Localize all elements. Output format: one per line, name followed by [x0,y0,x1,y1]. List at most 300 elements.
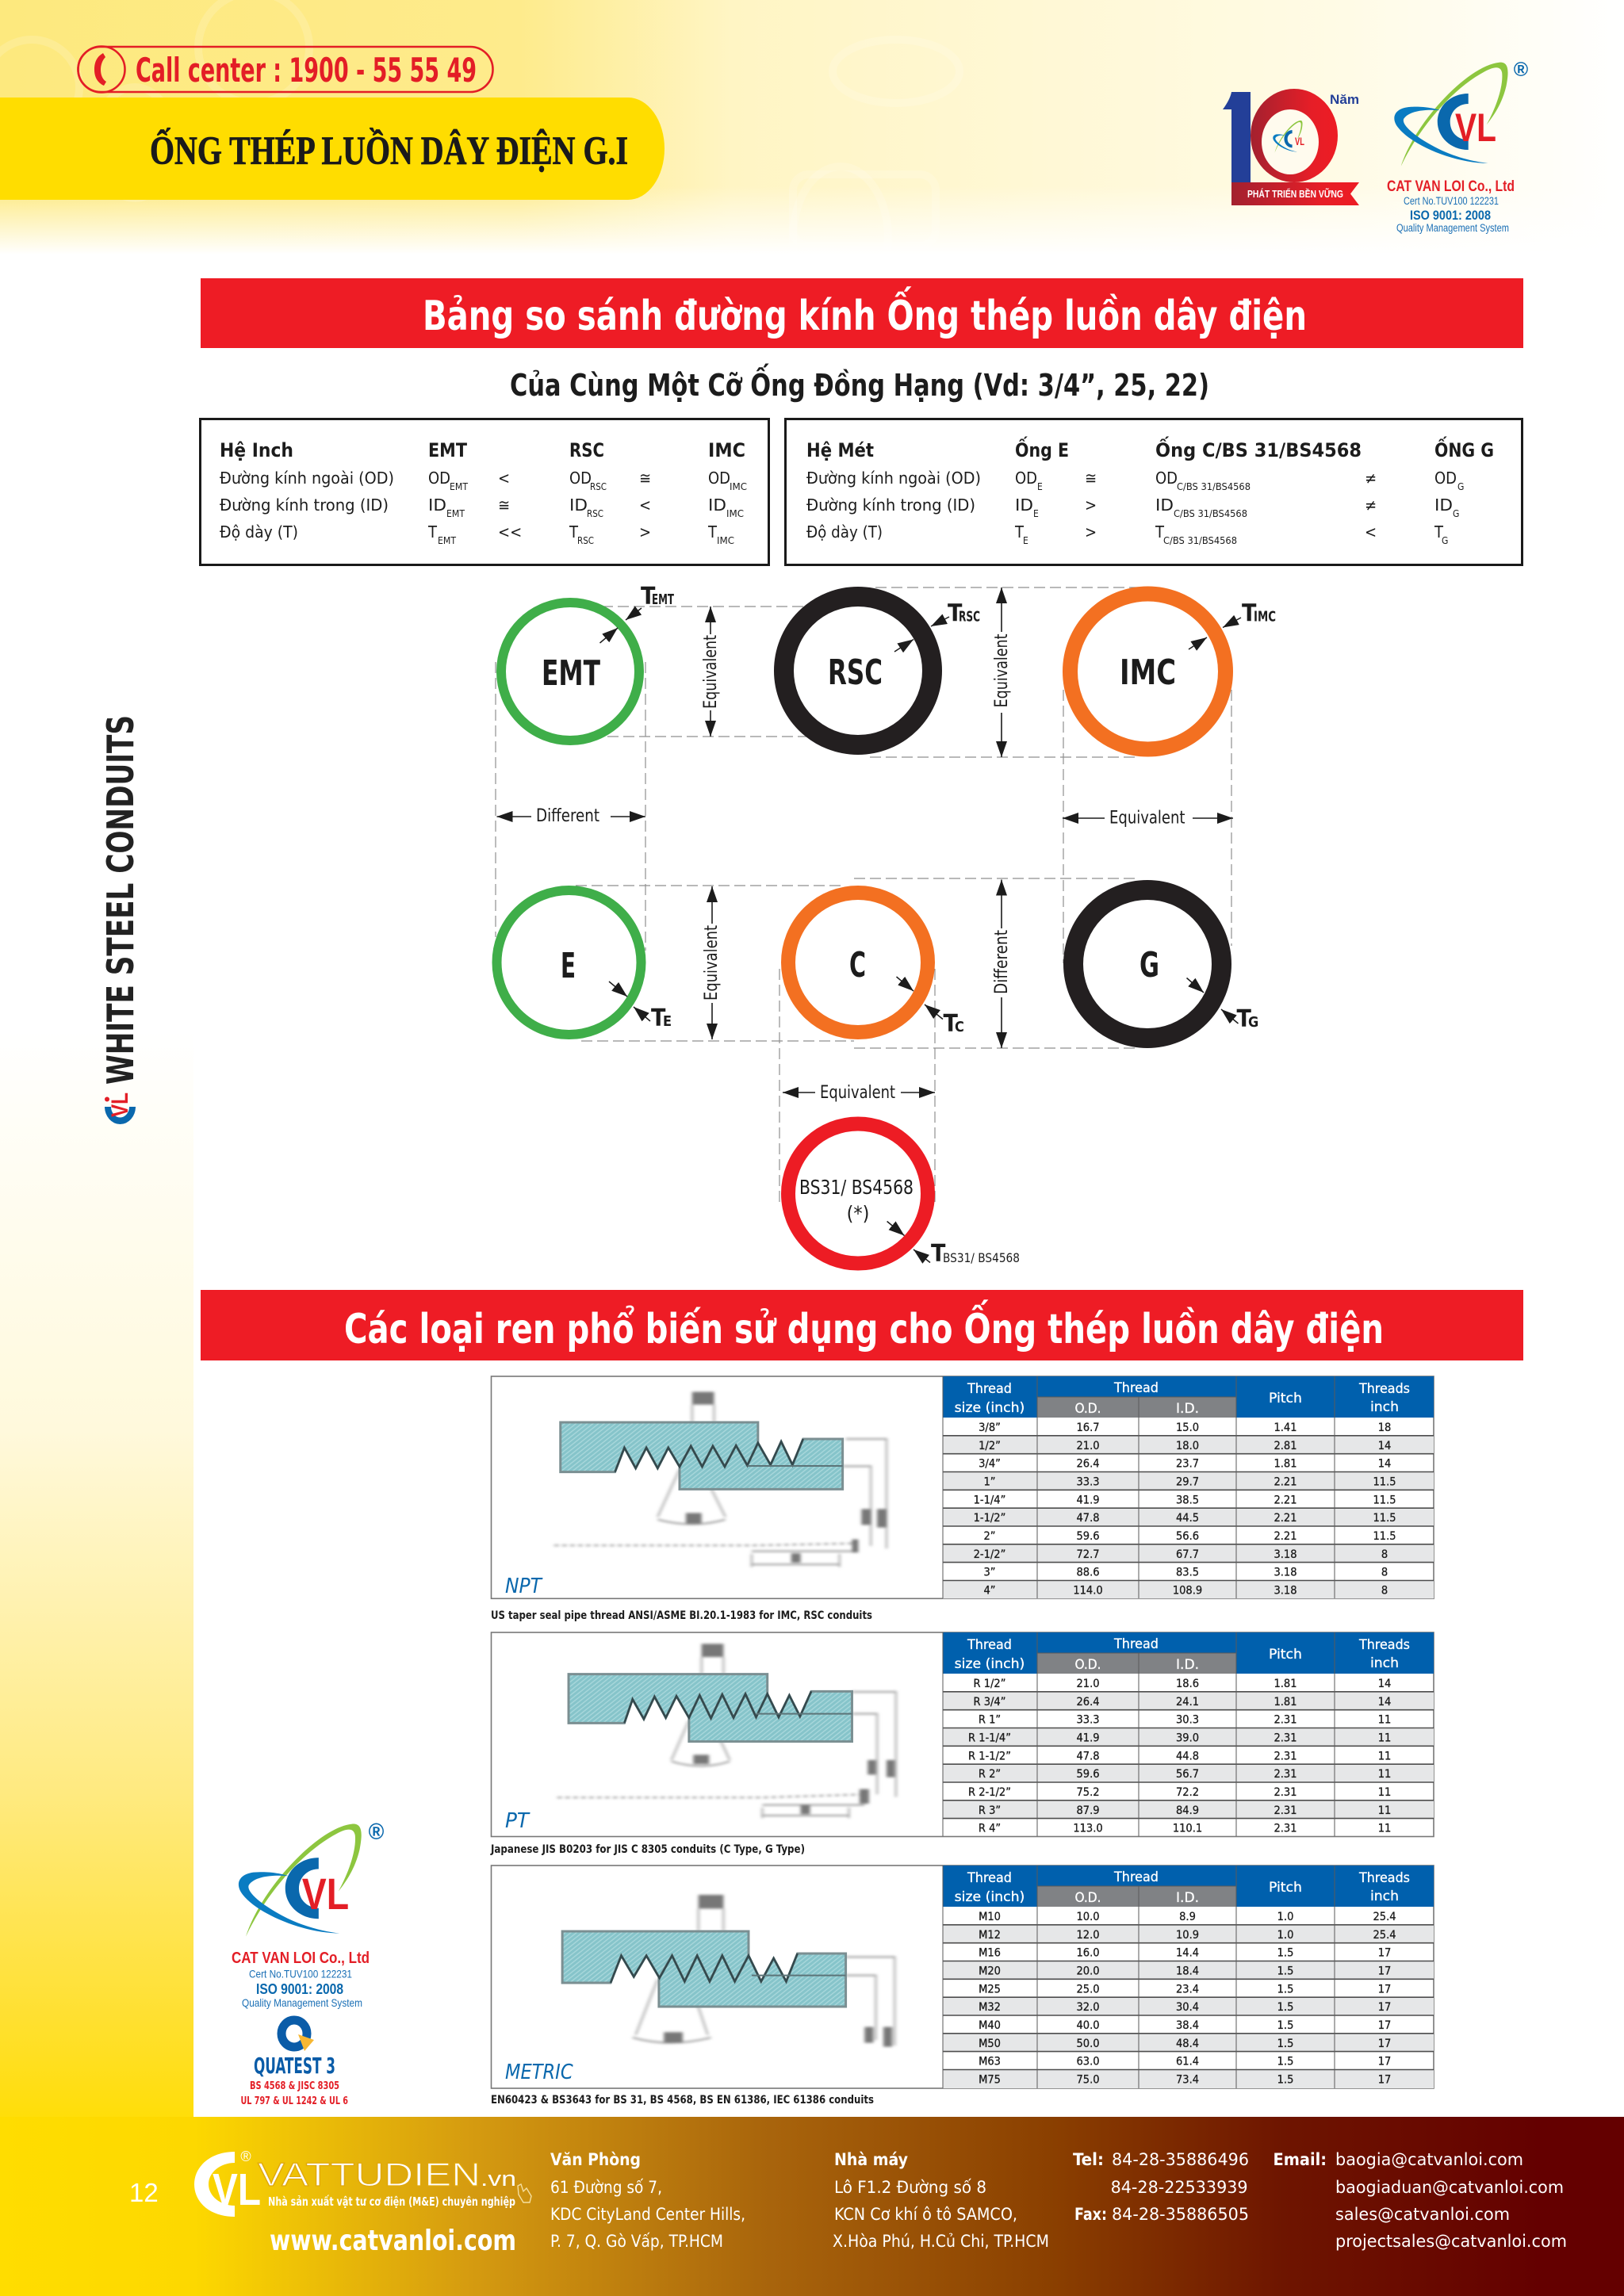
table: metric dimensions: 1.5 [1277,2074,1293,2087]
table: NPT dimensions: 11.5 [1373,1494,1396,1506]
table: metric dimensions: inch [1370,1888,1399,1904]
table: metric dimensions: 32.0 [1076,2001,1100,2014]
table: metric dimensions: 48.4 [1176,2038,1199,2050]
panel: metric system table: OD [1155,469,1178,488]
table: NPT dimensions: 59.6 [1076,1530,1100,1543]
table: metric dimensions: 1.5 [1277,1965,1293,1977]
table: metric dimensions: 17 [1378,2038,1391,2050]
panel: PT thread [492,1632,1434,1836]
table: NPT dimensions: 2” [983,1530,996,1543]
diagram: conduit comparison [496,583,1276,1268]
table: NPT dimensions: 44.5 [1176,1512,1199,1525]
table: metric dimensions: 25.4 [1373,1929,1396,1942]
table: metric dimensions: 17 [1378,1947,1391,1960]
panel: metric system table: T [1014,522,1025,541]
ring: IMC: IMC [1120,652,1176,693]
panel: inch system table: ≅ [498,496,510,515]
table: NPT dimensions: 47.8 [1076,1512,1100,1525]
table: PT dimensions: R 4” [979,1823,1001,1835]
panel: inch system table: ID [708,496,726,515]
panel: metric system table: OD [1434,469,1457,488]
table: PT dimensions: 39.0 [1176,1732,1199,1744]
brand name: VATTUDIEN [258,2156,481,2193]
ring: BS31/BS4568: BS31/ BS4568 [799,1176,914,1199]
panel: inch system table: ID [428,496,446,515]
table: metric dimensions: 10.0 [1076,1911,1100,1923]
table: PT dimensions: 1.81 [1274,1678,1297,1690]
thickness labels: RSC [959,609,980,625]
table: PT dimensions: 56.7 [1176,1768,1199,1781]
panel: metric system table: G [1457,481,1464,492]
panel: inch system table: Đường kính trong (ID) [220,496,389,515]
panel: metric system table: ID [1015,496,1033,515]
email list: baogia@catvanloi.com [1335,2150,1523,2169]
panel: inch system table: EMT [446,508,465,519]
table: metric dimensions: 17 [1378,2056,1391,2068]
panel: metric system table: OD [1015,469,1037,488]
ring: G [1074,890,1221,1039]
panel: inch system table: > [639,522,651,541]
certifications block: BS 4568 & JISC 8305 [250,2080,339,2092]
panel: metric system table: C/BS 31/BS4568 [1163,535,1237,546]
logo: white CVL [194,2149,261,2217]
panel: metric system table: ≅ [1085,469,1097,488]
panel: inch system table: < [498,469,510,488]
table: NPT dimensions: O.D. [1075,1401,1101,1417]
table: NPT dimensions: Pitch [1269,1391,1302,1406]
table: metric dimensions [943,1866,1434,2088]
table: metric dimensions: M50 [979,2038,1001,2050]
table: metric dimensions: 12.0 [1076,1929,1100,1942]
panel: metric system table: T [1155,522,1165,541]
factory address: X.Hòa Phú, H.Củ Chi, TP.HCM [833,2232,1049,2251]
table: NPT dimensions: 67.7 [1176,1548,1199,1561]
table: NPT dimensions: 108.9 [1173,1584,1202,1597]
table: PT dimensions: 72.2 [1176,1786,1199,1799]
logo: white CVL: ® [240,2149,251,2164]
thickness labels: T [1237,1005,1251,1033]
table: metric dimensions: 23.4 [1176,1983,1199,1996]
table: metric dimensions: 40.0 [1076,2019,1100,2032]
icon: mini CVL logo: VL [107,1093,133,1117]
panel: metric system table: Ống E [1015,435,1069,461]
table: NPT dimensions: 11.5 [1373,1530,1396,1543]
dimension labels [536,633,1185,1103]
table: PT dimensions: R 2” [979,1768,1001,1781]
table: PT dimensions: 2.31 [1274,1750,1297,1762]
certifications block: UL 797 & UL 1242 & UL 6 [241,2095,348,2107]
table: PT dimensions: size (inch) [955,1656,1025,1672]
table: PT dimensions: 11 [1378,1804,1391,1817]
table: PT dimensions: R 2-1/2” [968,1786,1011,1799]
table: metric dimensions: M25 [979,1983,1001,1996]
table: metric dimensions: 1.0 [1277,1929,1293,1942]
subheading: Của Cùng Một Cỡ Ống Đồng Hạng (Vd: 3/4”, 25, 22) [510,364,1209,403]
dimension labels: Different [992,930,1012,994]
panel: metric thread [492,1866,1434,2088]
panel: inch system table: Hệ Inch [220,439,293,461]
logo: CVL top right [1387,59,1529,234]
table: metric dimensions: Thread [967,1870,1012,1886]
panel: metric system table: Đường kính trong (ID) [806,496,975,515]
dimension labels: Equivalent [702,925,722,1001]
office address: Văn Phòng [550,2150,641,2169]
panel: inch system table: EMT [428,439,467,461]
table: NPT dimensions: 33.3 [1076,1476,1100,1489]
panel: inch system table: IMC [730,481,747,492]
table: metric dimensions: 25.4 [1373,1911,1396,1923]
thickness labels: E [663,1013,672,1030]
table: PT dimensions: R 3” [979,1804,1001,1817]
panel: inch system table: IMC [708,439,745,461]
panel: metric system table: ID [1434,496,1453,515]
table: metric dimensions: 17 [1378,2001,1391,2014]
office address: P. 7, Q. Gò Vấp, TP.HCM [550,2232,723,2251]
table: NPT dimensions: 3” [983,1567,996,1579]
table: NPT dimensions: 18 [1378,1422,1391,1434]
table: metric dimensions: 20.0 [1076,1965,1100,1977]
table: metric dimensions: 1.5 [1277,2038,1293,2050]
table: NPT dimensions: 88.6 [1076,1567,1100,1579]
office address [550,2150,745,2251]
thickness labels: EMT [652,591,674,608]
table: metric dimensions: Threads [1358,1870,1410,1886]
left yellow strip [0,1031,193,2117]
panel: metric system table: Độ dày (T) [806,522,883,541]
table: PT dimensions: 75.2 [1076,1786,1100,1799]
factory address [833,2150,1049,2251]
certifications block: QUATEST 3 [254,2053,335,2079]
thickness labels: G [1248,1014,1258,1031]
dimension labels: Equivalent [992,633,1012,707]
table: PT dimensions: 1.81 [1274,1696,1297,1709]
caption: PT: Japanese JIS B0203 for JIS C 8305 conduits (C Type, G Type) [490,1843,805,1856]
panel: inch system table: OD [708,469,730,488]
factory address: Lô F1.2 Đường số 8 [834,2178,986,2197]
table: metric dimensions: 17 [1378,2074,1391,2087]
panel: inch system table: T [427,522,438,541]
panel: metric system table: ≠ [1365,496,1377,515]
table: NPT dimensions: 72.7 [1076,1548,1100,1561]
logo: CVL top right: ISO 9001: 2008 [1410,208,1491,223]
thickness labels: IMC [1254,609,1276,625]
diagram: PT thread profile [557,1644,896,1818]
table: PT dimensions: 11 [1378,1714,1391,1727]
ring: RSC: RSC [828,652,883,693]
table: metric dimensions: Thread [1113,1869,1159,1885]
panel: inch system table: OD [569,469,592,488]
panel: metric system table: ≠ [1365,469,1377,488]
table: metric dimensions: M10 [979,1911,1001,1923]
heading band: thread types: Các loại ren phổ biến sử dụng cho Ống thép luồn dây điện [344,1299,1384,1353]
caption: NPT: US taper seal pipe thread ANSI/ASME BI.20.1-1983 for IMC, RSC conduits [491,1609,872,1622]
phone and fax: 84-28-35886496 [1112,2150,1249,2169]
table: NPT dimensions: 3.18 [1274,1567,1297,1579]
table: metric dimensions: M12 [979,1929,1001,1942]
logo: CVL top right: Cert No.TUV100 122231 [1404,195,1499,207]
table: metric dimensions: 10.9 [1176,1929,1199,1942]
panel: metric system table [785,419,1522,564]
table: NPT dimensions: inch [1370,1399,1399,1415]
ring: EMT: EMT [542,653,600,694]
table: NPT dimensions: Thread [967,1381,1012,1397]
logo: 10 years: VL [1295,135,1304,147]
table: PT dimensions: R 1-1/2” [968,1750,1011,1762]
panel: metric system table: > [1085,522,1097,541]
table: PT dimensions: inch [1370,1655,1399,1671]
side label: white steel conduits: WHITE STEEL CONDUITS [99,715,142,1085]
band title: ỐNG THÉP LUỒN DÂY ĐIỆN G.I [150,128,628,174]
table: NPT dimensions: 41.9 [1076,1494,1100,1506]
table: PT dimensions: 2.31 [1274,1768,1297,1781]
table: PT dimensions [943,1632,1434,1836]
table: NPT dimensions [943,1376,1434,1598]
panel: inch system table: T [569,522,579,541]
dimension labels: Different [536,806,599,826]
panel: inch system table: ID [569,496,588,515]
diagram: metric thread profile [562,1895,894,2047]
table: metric dimensions: 1.0 [1277,1911,1293,1923]
phone and fax [1073,2150,1249,2224]
table: PT dimensions: 2.31 [1274,1714,1297,1727]
table: NPT dimensions: 16.7 [1076,1422,1100,1434]
panel: metric system table: C/BS 31/BS4568 [1177,481,1251,492]
table: PT dimensions: 30.3 [1176,1714,1199,1727]
panel: inch system table: EMT [438,535,456,546]
table: metric dimensions: 25.0 [1076,1983,1100,1996]
table: NPT dimensions: 14 [1378,1458,1391,1471]
header background wash [0,0,1624,309]
icon: mini CVL logo [105,1093,136,1124]
table: NPT dimensions: 8 [1381,1584,1388,1597]
certifications block: ISO 9001: 2008 [256,1981,343,1997]
table: metric dimensions: 1.5 [1277,1983,1293,1996]
email list: sales@catvanloi.com [1335,2205,1510,2224]
table: metric dimensions: size (inch) [955,1889,1025,1905]
panel: inch system table [200,419,769,564]
table: PT dimensions: 41.9 [1076,1732,1100,1744]
table: NPT dimensions: 83.5 [1176,1567,1199,1579]
call center pill [78,46,493,92]
thickness labels: T [944,1010,958,1038]
call center text: Call center : 1900 - 55 55 49 [136,51,477,90]
heading band: thread types [201,1290,1523,1360]
table: metric dimensions: M20 [979,1965,1001,1977]
table: PT dimensions: 113.0 [1073,1823,1103,1835]
certifications block: Quality Management System [242,1996,362,2009]
table: NPT dimensions: 11.5 [1373,1512,1396,1525]
certifications block: Cert No.TUV100 122231 [249,1968,352,1980]
table: PT dimensions: Threads [1358,1637,1410,1653]
tagline: Nhà sản xuất vật tư cơ điện (M&E) chuyên nghiệp [268,2195,515,2209]
panel: metric system table: ỐNG G [1434,435,1494,461]
logo: CVL mark: VL [302,1869,349,1919]
table: PT dimensions: 2.31 [1274,1786,1297,1799]
table: PT dimensions: 14 [1378,1696,1391,1709]
table: metric dimensions: 17 [1378,1983,1391,1996]
website: www.catvanloi.com [270,2225,516,2257]
table: NPT dimensions: 18.0 [1176,1440,1199,1452]
table: PT dimensions: 59.6 [1076,1768,1100,1781]
table: PT dimensions: R 1-1/4” [968,1732,1011,1744]
panel: inch system table: Đường kính ngoài (OD) [220,469,394,488]
table: metric dimensions: O.D. [1075,1890,1101,1906]
table: PT dimensions: 33.3 [1076,1714,1100,1727]
table: PT dimensions: I.D. [1176,1657,1199,1673]
caption: metric: EN60423 & BS3643 for BS 31, BS 4568, BS EN 61386, IEC 61386 conduits [491,2094,874,2107]
table: NPT dimensions: I.D. [1176,1401,1199,1417]
table: PT dimensions: O.D. [1075,1657,1101,1673]
table: metric dimensions: M32 [979,2001,1001,2014]
panel: inch system table: EMT [450,481,468,492]
factory address: KCN Cơ khí ô tô SAMCO, [834,2205,1017,2224]
certifications block: CAT VAN LOI Co., Ltd [232,1950,370,1967]
panel: metric system table: Ống C/BS 31/BS4568 [1155,435,1362,461]
panel: inch system table: RSC [590,481,607,492]
email list: baogiaduan@catvanloi.com [1335,2178,1564,2197]
panel: metric system table: E [1023,535,1028,546]
table: NPT dimensions: 8 [1381,1548,1388,1561]
page number: 12 [129,2178,159,2207]
table: PT dimensions: 11 [1378,1768,1391,1781]
thickness labels: T [651,1004,666,1032]
certifications block [232,1819,384,2107]
table: NPT dimensions: size (inch) [955,1400,1025,1416]
panel: metric system table: ID [1155,496,1174,515]
panel: inch system table: OD [428,469,450,488]
logo: CVL mark [239,1819,384,1937]
table: metric dimensions: 17 [1378,1965,1391,1977]
table: PT dimensions: 2.31 [1274,1823,1297,1835]
logo: 10 years: PHÁT TRIỂN BỀN VỮNG [1247,188,1343,200]
table: metric dimensions: 1.5 [1277,2019,1293,2032]
table: NPT dimensions: 23.7 [1176,1458,1199,1471]
table: metric dimensions: 73.4 [1176,2074,1199,2087]
panel: inch system table: < [639,496,651,515]
table: PT dimensions: Pitch [1269,1647,1302,1663]
panel: metric system table: E [1033,508,1039,519]
table: metric dimensions: 75.0 [1076,2074,1100,2087]
panel: inch system table: << [498,522,522,541]
table: metric dimensions: 14.4 [1176,1947,1199,1960]
icon: hand pointer [518,2184,531,2202]
ring: C [788,893,928,1032]
table: NPT dimensions: 3.18 [1274,1584,1297,1597]
table: metric dimensions: 50.0 [1076,2038,1100,2050]
table: metric dimensions: I.D. [1176,1890,1199,1906]
dimension labels: Equivalent [701,635,721,709]
table: PT dimensions: R 1” [979,1714,1001,1727]
brand suffix: .vn [481,2167,516,2191]
logo: CVL top right: VL [1455,105,1496,150]
ring: E: E [561,946,576,986]
ring: E [496,890,641,1035]
table: NPT dimensions: Threads [1358,1381,1410,1397]
table: PT dimensions: 47.8 [1076,1750,1100,1762]
table: metric dimensions: 8.9 [1179,1911,1196,1923]
table: NPT dimensions: 3.18 [1274,1548,1297,1561]
table: PT dimensions: 11 [1378,1823,1391,1835]
panel: inch system table: T [707,522,718,541]
logo: 10 years [1223,89,1359,205]
table: metric dimensions: M16 [979,1947,1001,1960]
table: PT dimensions: 2.31 [1274,1804,1297,1817]
table: PT dimensions: 11 [1378,1786,1391,1799]
table: metric dimensions: M75 [979,2074,1001,2087]
table: NPT dimensions: 56.6 [1176,1530,1199,1543]
thickness labels: T [931,1240,946,1268]
label: NPT: NPT [505,1575,543,1598]
table: NPT dimensions: 2.21 [1274,1476,1297,1489]
email list: projectsales@catvanloi.com [1335,2232,1567,2251]
panel: inch system table: RSC [587,508,603,519]
table: NPT dimensions: 1.81 [1274,1458,1297,1471]
phone and fax: 84-28-35886505 [1112,2205,1249,2224]
table: NPT dimensions: 26.4 [1076,1458,1100,1471]
table: metric dimensions: M63 [979,2056,1001,2068]
table: NPT dimensions: Thread [1113,1380,1159,1396]
table: PT dimensions: Thread [967,1637,1012,1653]
table: NPT dimensions: 2.21 [1274,1512,1297,1525]
icon: phone [78,46,125,92]
panel: inch system table: IMC [717,535,734,546]
factory address: Nhà máy [834,2150,908,2169]
table: metric dimensions: 38.4 [1176,2019,1199,2032]
ring: BS31/BS4568 [788,1124,928,1264]
table: PT dimensions: 44.8 [1176,1750,1199,1762]
table: NPT dimensions: 1/2” [979,1440,1001,1452]
table: metric dimensions: 17 [1378,2019,1391,2032]
table: metric dimensions: 1.5 [1277,2001,1293,2014]
table: NPT dimensions: 1-1/4” [974,1494,1005,1506]
table: metric dimensions: 61.4 [1176,2056,1199,2068]
table: NPT dimensions: 2.21 [1274,1494,1297,1506]
table: metric dimensions: 16.0 [1076,1947,1100,1960]
table: NPT dimensions: 3/8” [979,1422,1001,1434]
ring: G: G [1139,945,1159,985]
table: metric dimensions: Pitch [1269,1880,1302,1896]
table: metric dimensions: 1.5 [1277,2056,1293,2068]
dimension arrows [496,587,1233,1093]
logo: CVL mark: ® [369,1819,384,1844]
panel: metric system table: Đường kính ngoài (OD) [806,469,981,488]
panel: NPT thread [492,1376,1434,1598]
thickness arrows [599,608,1241,1262]
table: NPT dimensions: 1-1/2” [974,1512,1005,1525]
table: NPT dimensions: 2.21 [1274,1530,1297,1543]
logo: CVL top right: ® [1514,59,1529,81]
table: PT dimensions: 87.9 [1076,1804,1100,1817]
panel: metric system table: C/BS 31/BS4568 [1174,508,1247,519]
table: PT dimensions: R 1/2” [974,1678,1005,1690]
table: PT dimensions: 2.31 [1274,1732,1297,1744]
table: metric dimensions: 30.4 [1176,2001,1199,2014]
table: PT dimensions: 26.4 [1076,1696,1100,1709]
table: NPT dimensions: 8 [1381,1567,1388,1579]
office address: 61 Đường số 7, [550,2178,662,2197]
panel: metric system table: G [1442,535,1448,546]
table: PT dimensions: 84.9 [1176,1804,1199,1817]
footer [0,2117,1624,2296]
email list: Email: [1274,2150,1327,2169]
table: NPT dimensions: 4” [983,1584,996,1597]
table: metric dimensions: M40 [979,2019,1001,2032]
panel: inch system table: ≅ [639,469,651,488]
ring: C: C [849,945,866,985]
table: NPT dimensions: 1.41 [1274,1422,1297,1434]
phone and fax: 84-28-22533939 [1111,2178,1248,2197]
table: metric dimensions: 18.4 [1176,1965,1199,1977]
